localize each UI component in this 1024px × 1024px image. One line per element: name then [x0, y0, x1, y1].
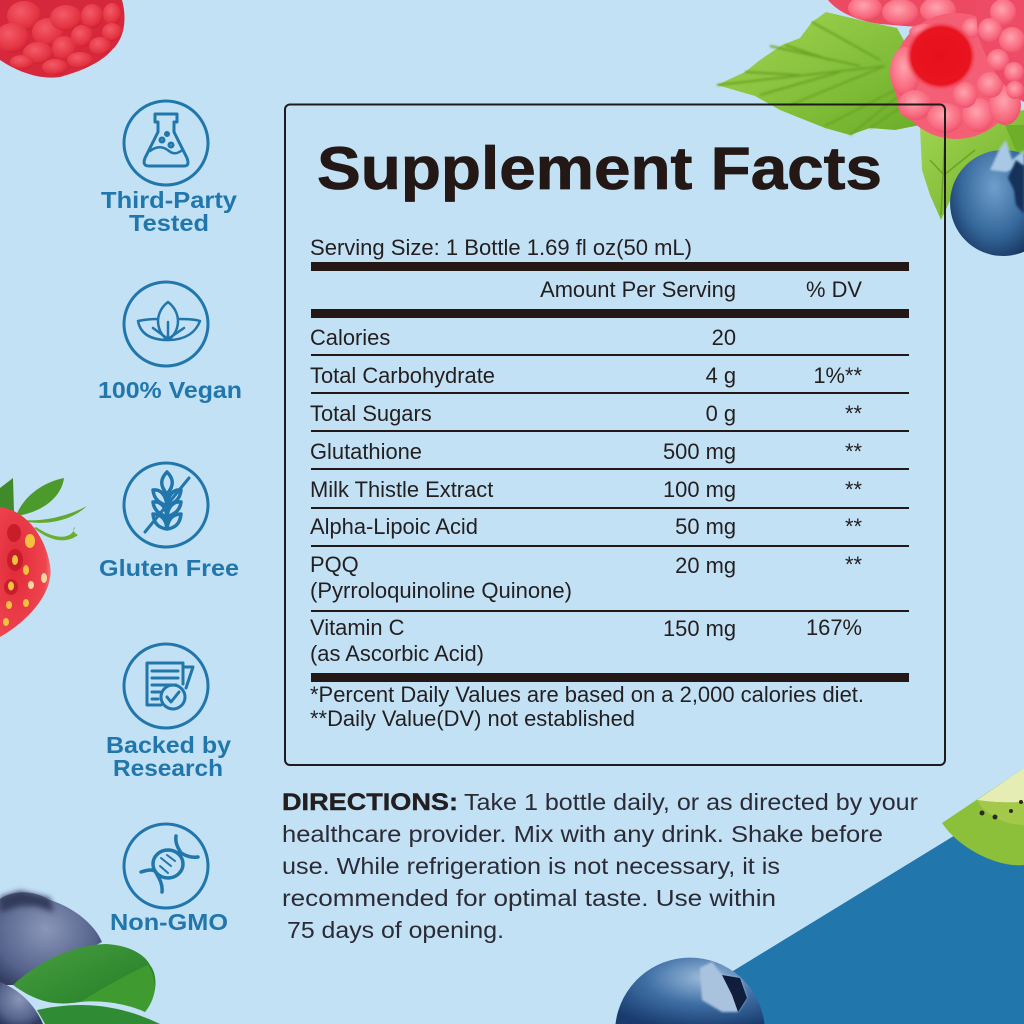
row: alpha-lipoic acid — [310, 514, 862, 539]
illustration: blueberry top right — [950, 140, 1024, 256]
row: PQQ: 20 mg — [675, 553, 736, 578]
label — [106, 732, 231, 781]
table header: Amount Per Serving — [540, 277, 736, 302]
label: Tested — [129, 210, 209, 236]
label — [101, 187, 237, 236]
label: Third-Party — [101, 187, 237, 213]
text: directions: Take 1 bottle daily, or as directed by your — [464, 789, 918, 815]
row: total carbohydrate: 1%** — [813, 363, 862, 388]
panel: supplement facts — [285, 104, 945, 765]
row: calories — [310, 325, 736, 350]
row: glutathione: Glutathione — [310, 439, 422, 464]
heading: Supplement Facts: Supplement Facts — [317, 135, 882, 202]
row: vitamin C — [310, 615, 862, 666]
blue corner triangle — [647, 793, 1024, 1024]
label: Backed by — [106, 732, 231, 758]
footnotes: **Daily Value(DV) not established — [310, 706, 635, 731]
icon: leaves — [124, 282, 208, 366]
text: directions: recommended for optimal taste. Use within — [282, 885, 776, 911]
text: directions: DIRECTIONS: — [282, 789, 458, 816]
row: PQQ: PQQ — [310, 552, 359, 577]
row: total sugars: ** — [845, 401, 862, 426]
row: alpha-lipoic acid: ** — [845, 514, 862, 539]
row: milk thistle extract: 100 mg — [663, 477, 736, 502]
row: calories: 20 — [712, 325, 736, 350]
row: vitamin C: 150 mg — [663, 616, 736, 641]
row: calories: Calories — [310, 325, 390, 350]
table header: % DV — [806, 277, 862, 302]
icon: document with check — [124, 644, 208, 728]
row: milk thistle extract: ** — [845, 477, 862, 502]
row: PQQ: ** — [845, 552, 862, 577]
thin rules — [311, 354, 909, 612]
icon: wheat crossed out — [124, 463, 208, 547]
badge: non-GMO — [110, 824, 228, 935]
badge: third-party tested — [101, 101, 237, 236]
row: total sugars — [310, 401, 862, 426]
illustration: raspberry top left — [0, 0, 125, 78]
row: alpha-lipoic acid: 50 mg — [675, 514, 736, 539]
row: glutathione: 500 mg — [663, 439, 736, 464]
icon: flask — [124, 101, 208, 185]
row: vitamin C: Vitamin C — [310, 615, 404, 640]
row: glutathione: ** — [845, 439, 862, 464]
row: total carbohydrate: 4 g — [706, 363, 736, 388]
illustration: leaf top right — [717, 12, 920, 135]
label: Gluten Free — [99, 555, 239, 581]
illustration: blueberries bottom left — [0, 891, 102, 1024]
thick rules — [311, 262, 909, 682]
label: Non-GMO — [110, 909, 228, 935]
row: total carbohydrate: Total Carbohydrate — [310, 363, 495, 388]
row: alpha-lipoic acid: Alpha-Lipoic Acid — [310, 514, 478, 539]
footnotes: *Percent Daily Values are based on a 2,000 calories diet. — [310, 682, 864, 707]
illustration: green leaves bottom left — [13, 944, 160, 1024]
badge: gluten free — [99, 463, 239, 581]
badge: 100% vegan — [98, 282, 242, 403]
row: vitamin C: (as Ascorbic Acid) — [310, 641, 484, 666]
label: 100% Vegan — [98, 377, 242, 403]
illustration: kiwi slice — [942, 768, 1024, 865]
table header — [540, 277, 862, 302]
row: PQQ: (Pyrroloquinoline Quinone) — [310, 578, 572, 603]
text: directions — [282, 789, 918, 943]
row: glutathione — [310, 439, 862, 464]
illustration: blueberry bottom — [616, 958, 764, 1024]
row: total carbohydrate — [310, 363, 862, 388]
row: total sugars: 0 g — [706, 401, 736, 426]
text: directions: 75 days of opening. — [287, 917, 504, 943]
row: total sugars: Total Sugars — [310, 401, 432, 426]
footnotes — [310, 682, 864, 731]
illustration: raspberries top right — [828, 0, 1024, 139]
illustration: strawberry left — [0, 478, 87, 637]
text: directions: use. While refrigeration is not necessary, it is — [282, 853, 780, 879]
badge: backed by research — [106, 644, 231, 781]
row: milk thistle extract — [310, 477, 862, 502]
text: directions: healthcare provider. Mix with any drink. Shake before — [282, 821, 883, 847]
row: milk thistle extract: Milk Thistle Extract — [310, 477, 493, 502]
row: vitamin C: 167% — [806, 615, 862, 640]
illustration: leaf right — [920, 110, 1024, 220]
text: serving size: Serving Size: 1 Bottle 1.69 fl oz(50 mL) — [310, 235, 692, 260]
label: Research — [113, 755, 223, 781]
row: PQQ — [310, 552, 862, 603]
icon: DNA helix — [124, 824, 208, 908]
